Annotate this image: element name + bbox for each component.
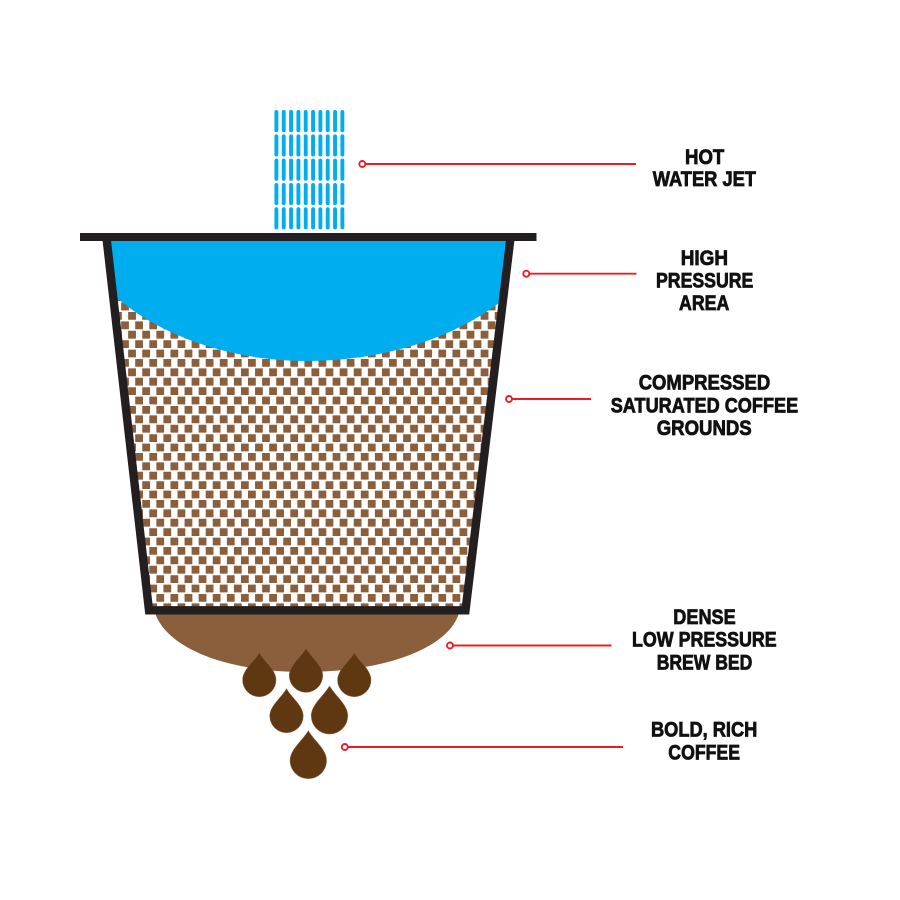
- label: BREW BED: [657, 650, 752, 674]
- label: WATER JET: [653, 167, 756, 191]
- dense brew bed: [155, 613, 459, 672]
- label: PRESSURE: [656, 269, 753, 293]
- label: HIGH: [681, 246, 728, 270]
- leader line: [359, 161, 636, 167]
- leader line: [523, 271, 636, 277]
- callout: hot water jet: [359, 145, 756, 191]
- label: COMPRESSED: [639, 370, 770, 394]
- label: LOW PRESSURE: [632, 628, 777, 652]
- drop 5: [311, 686, 348, 734]
- drop 6: [290, 731, 327, 779]
- label: [651, 718, 757, 764]
- callout: bold rich coffee: [342, 718, 757, 764]
- label: HOT: [685, 145, 724, 169]
- compressed coffee grounds: [107, 297, 512, 607]
- hot water jet: [276, 112, 342, 229]
- label: [656, 246, 753, 315]
- high pressure water area: [110, 241, 507, 361]
- label: DENSE: [673, 605, 736, 629]
- label: [653, 145, 756, 191]
- label: GROUNDS: [657, 416, 752, 440]
- label: BOLD, RICH: [651, 718, 757, 742]
- callout: high pressure area: [523, 246, 753, 315]
- label: [632, 605, 777, 674]
- pod rim: [80, 233, 536, 241]
- leader line: [447, 642, 612, 648]
- pod walls: [106, 238, 510, 610]
- drop 4: [270, 689, 303, 733]
- callout: compressed grounds: [506, 370, 798, 440]
- leader line: [342, 744, 623, 750]
- coffee drops: [243, 648, 371, 779]
- drop 2: [289, 648, 323, 692]
- label: SATURATED COFFEE: [611, 393, 798, 417]
- drop 3: [338, 653, 371, 697]
- callout: brew bed: [447, 605, 777, 674]
- label: AREA: [679, 291, 729, 315]
- label: COFFEE: [668, 740, 740, 764]
- coffee pod: [80, 233, 536, 672]
- leader line: [506, 396, 591, 402]
- drop 1: [243, 653, 276, 697]
- label: [611, 370, 798, 440]
